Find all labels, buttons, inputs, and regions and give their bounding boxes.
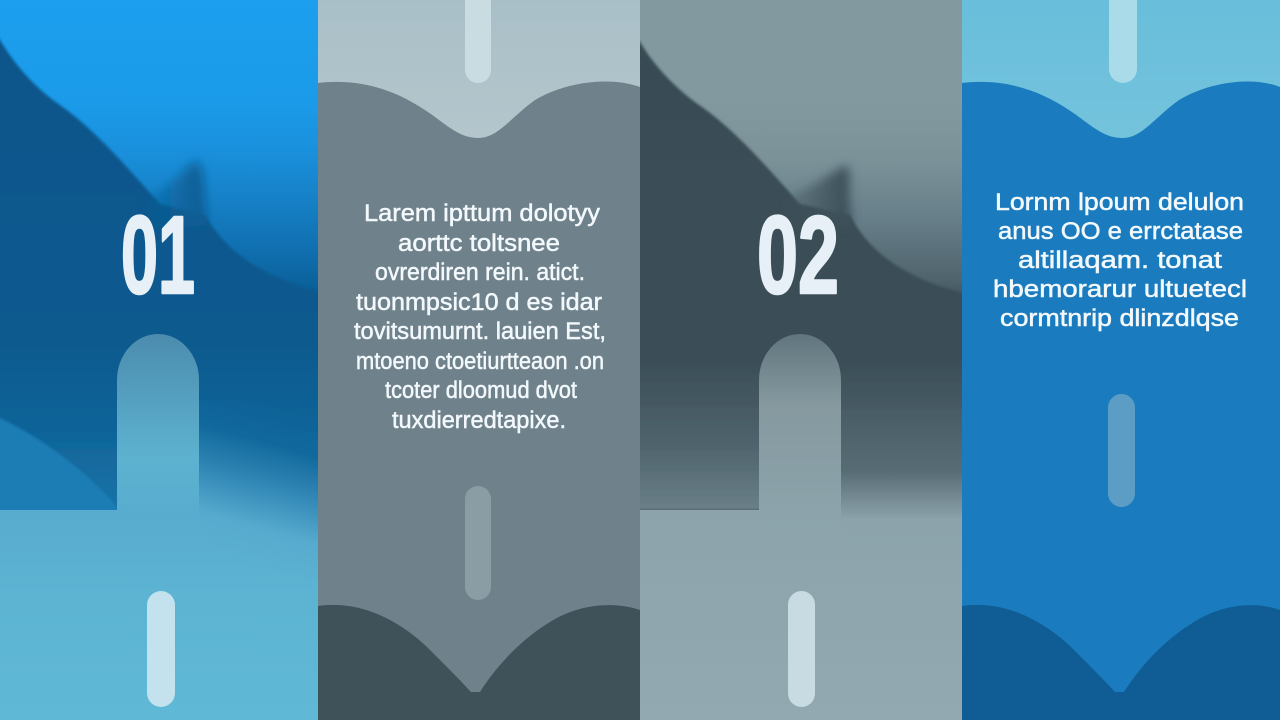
paragraph text: Larem ipttum dolotyy [364, 200, 600, 227]
middle pill [1108, 394, 1135, 507]
paragraph text: altillaqam. tonat [1018, 247, 1222, 274]
arch shape [117, 334, 199, 514]
bottom dark wave [962, 605, 1280, 720]
paragraph text: tuonmpsic10 d es idar [356, 289, 602, 316]
paragraph text [354, 200, 606, 434]
paragraph text: anus OO e errctatase [998, 218, 1243, 245]
paragraph text: ovrerdiren rein. atict. [375, 259, 585, 286]
paragraph text: cormtnrip dlinzdlqse [1000, 305, 1239, 332]
bottom dark wave [318, 605, 640, 720]
paragraph text: Lornm lpoum delulon [995, 189, 1244, 216]
number 02: 02 [757, 194, 839, 317]
paragraph text [993, 189, 1247, 332]
bottom pill [788, 591, 815, 707]
paragraph text: tuxdierredtapixe. [392, 407, 566, 434]
middle pill [465, 486, 491, 600]
panel 1: blue with number 01 [0, 0, 340, 720]
paragraph text: mtoeno ctoetiurtteaon .on [356, 348, 604, 375]
top pill [465, 0, 491, 83]
top pill [1109, 0, 1137, 83]
arch shape [759, 334, 841, 512]
number 01: 01 [121, 194, 195, 317]
paragraph text: tovitsumurnt. lauien Est, [354, 318, 606, 345]
bottom pill [147, 591, 175, 707]
panel 3: slate with number 02 [640, 0, 962, 720]
panel 2: grey with paragraph [318, 0, 640, 720]
paragraph text: hbemorarur ultuetecl [993, 276, 1247, 303]
panel 4: blue with paragraph [962, 0, 1280, 720]
paragraph text: tcoter dloomud dvot [385, 377, 577, 404]
paragraph text: aorttc toltsnee [398, 230, 560, 257]
